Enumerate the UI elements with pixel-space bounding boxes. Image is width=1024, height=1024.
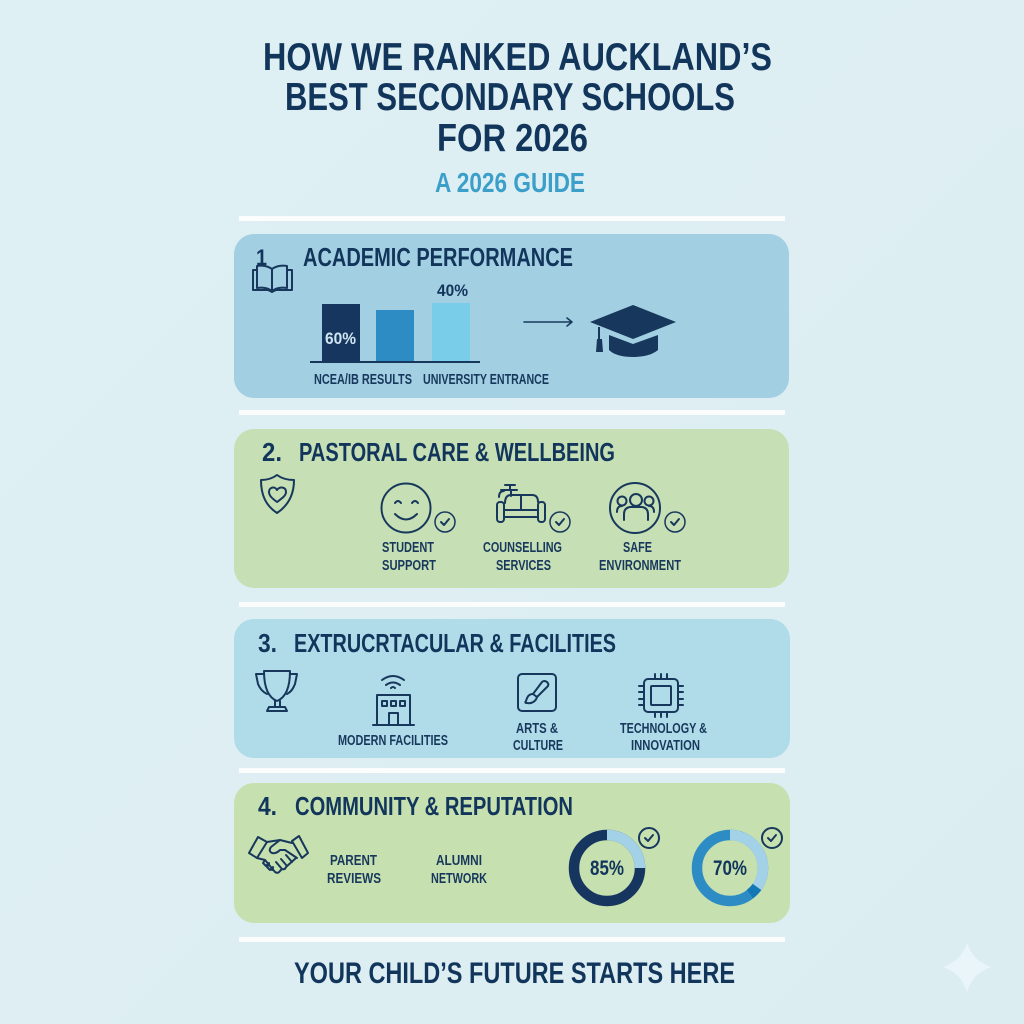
- icon: sparkle watermark: [943, 943, 991, 992]
- title: BEST SECONDARY SCHOOLS: [285, 76, 735, 119]
- label: parent reviews: PARENT: [330, 853, 377, 869]
- icon: handshake: [249, 836, 308, 873]
- item: modern facilities: MODERN FACILITIES: [338, 733, 448, 749]
- item: technology and innovation: TECHNOLOGY &: [620, 721, 707, 737]
- item: student support: SUPPORT: [382, 558, 436, 574]
- item: counselling services: SERVICES: [496, 558, 551, 574]
- icon: shield with heart: [261, 475, 294, 513]
- item: arts and culture: ARTS &: [516, 721, 558, 737]
- heading: pastoral care: PASTORAL CARE & WELLBEING: [299, 437, 615, 467]
- panel: extracurricular and facilities: [234, 619, 790, 758]
- section number 1: 1: [256, 245, 267, 270]
- heading: pastoral care: 2.: [262, 437, 282, 467]
- item: safe environment: ENVIRONMENT: [599, 558, 681, 574]
- label: alumni network: ALUMNI: [436, 853, 482, 869]
- footer tagline: YOUR CHILD’S FUTURE STARTS HERE: [294, 957, 735, 990]
- donut chart: 70%: 70%: [713, 857, 747, 880]
- panel: community and reputation: [234, 783, 790, 923]
- item: safe environment: SAFE: [623, 540, 652, 556]
- donut chart: 70%: [697, 828, 782, 901]
- item: arts and culture: [513, 674, 563, 754]
- heading: community: 4.: [258, 791, 277, 821]
- item: technology and innovation: [620, 674, 707, 754]
- value: 60%: 60%: [325, 329, 356, 348]
- heading: academic performance: ACADEMIC PERFORMANCE: [303, 242, 573, 272]
- item: safe environment: [599, 483, 685, 574]
- donut chart: 85%: [574, 828, 659, 901]
- icon: open book: [253, 266, 292, 292]
- heading: community: COMMUNITY & REPUTATION: [295, 791, 573, 821]
- donut chart: 85%: 85%: [590, 857, 624, 880]
- heading: extracurricular: EXTRUCRTACULAR & FACILITIES: [294, 628, 616, 658]
- label: alumni network: NETWORK: [431, 871, 487, 887]
- panel: pastoral care and wellbeing: [234, 429, 789, 588]
- axis label: UNIVERSITY ENTRANCE: [423, 372, 549, 388]
- label: parent reviews: [327, 853, 381, 887]
- icon: graduation cap: [590, 305, 676, 357]
- item: student support: STUDENT: [382, 540, 434, 556]
- icon: trophy: [256, 671, 297, 711]
- panel: academic performance: [234, 234, 789, 398]
- label: alumni network: [431, 853, 487, 887]
- item: counselling services: [483, 485, 570, 574]
- bar chart: [310, 281, 549, 388]
- item: technology and innovation: INNOVATION: [631, 738, 700, 754]
- title: HOW WE RANKED AUCKLAND’S: [263, 36, 772, 79]
- value: 40%: 40%: [437, 281, 468, 300]
- item: student support: [382, 484, 455, 574]
- item: modern facilities: [338, 676, 448, 749]
- arrow: [524, 318, 572, 326]
- heading: extracurricular: 3.: [258, 628, 277, 658]
- item: counselling services: COUNSELLING: [483, 540, 562, 556]
- label: parent reviews: REVIEWS: [327, 871, 381, 887]
- title: FOR 2026: [437, 117, 588, 160]
- item: arts and culture: CULTURE: [513, 738, 563, 754]
- axis label: NCEA/IB RESULTS: [314, 372, 412, 388]
- subtitle: A 2026 GUIDE: [435, 167, 585, 198]
- title: [263, 36, 772, 160]
